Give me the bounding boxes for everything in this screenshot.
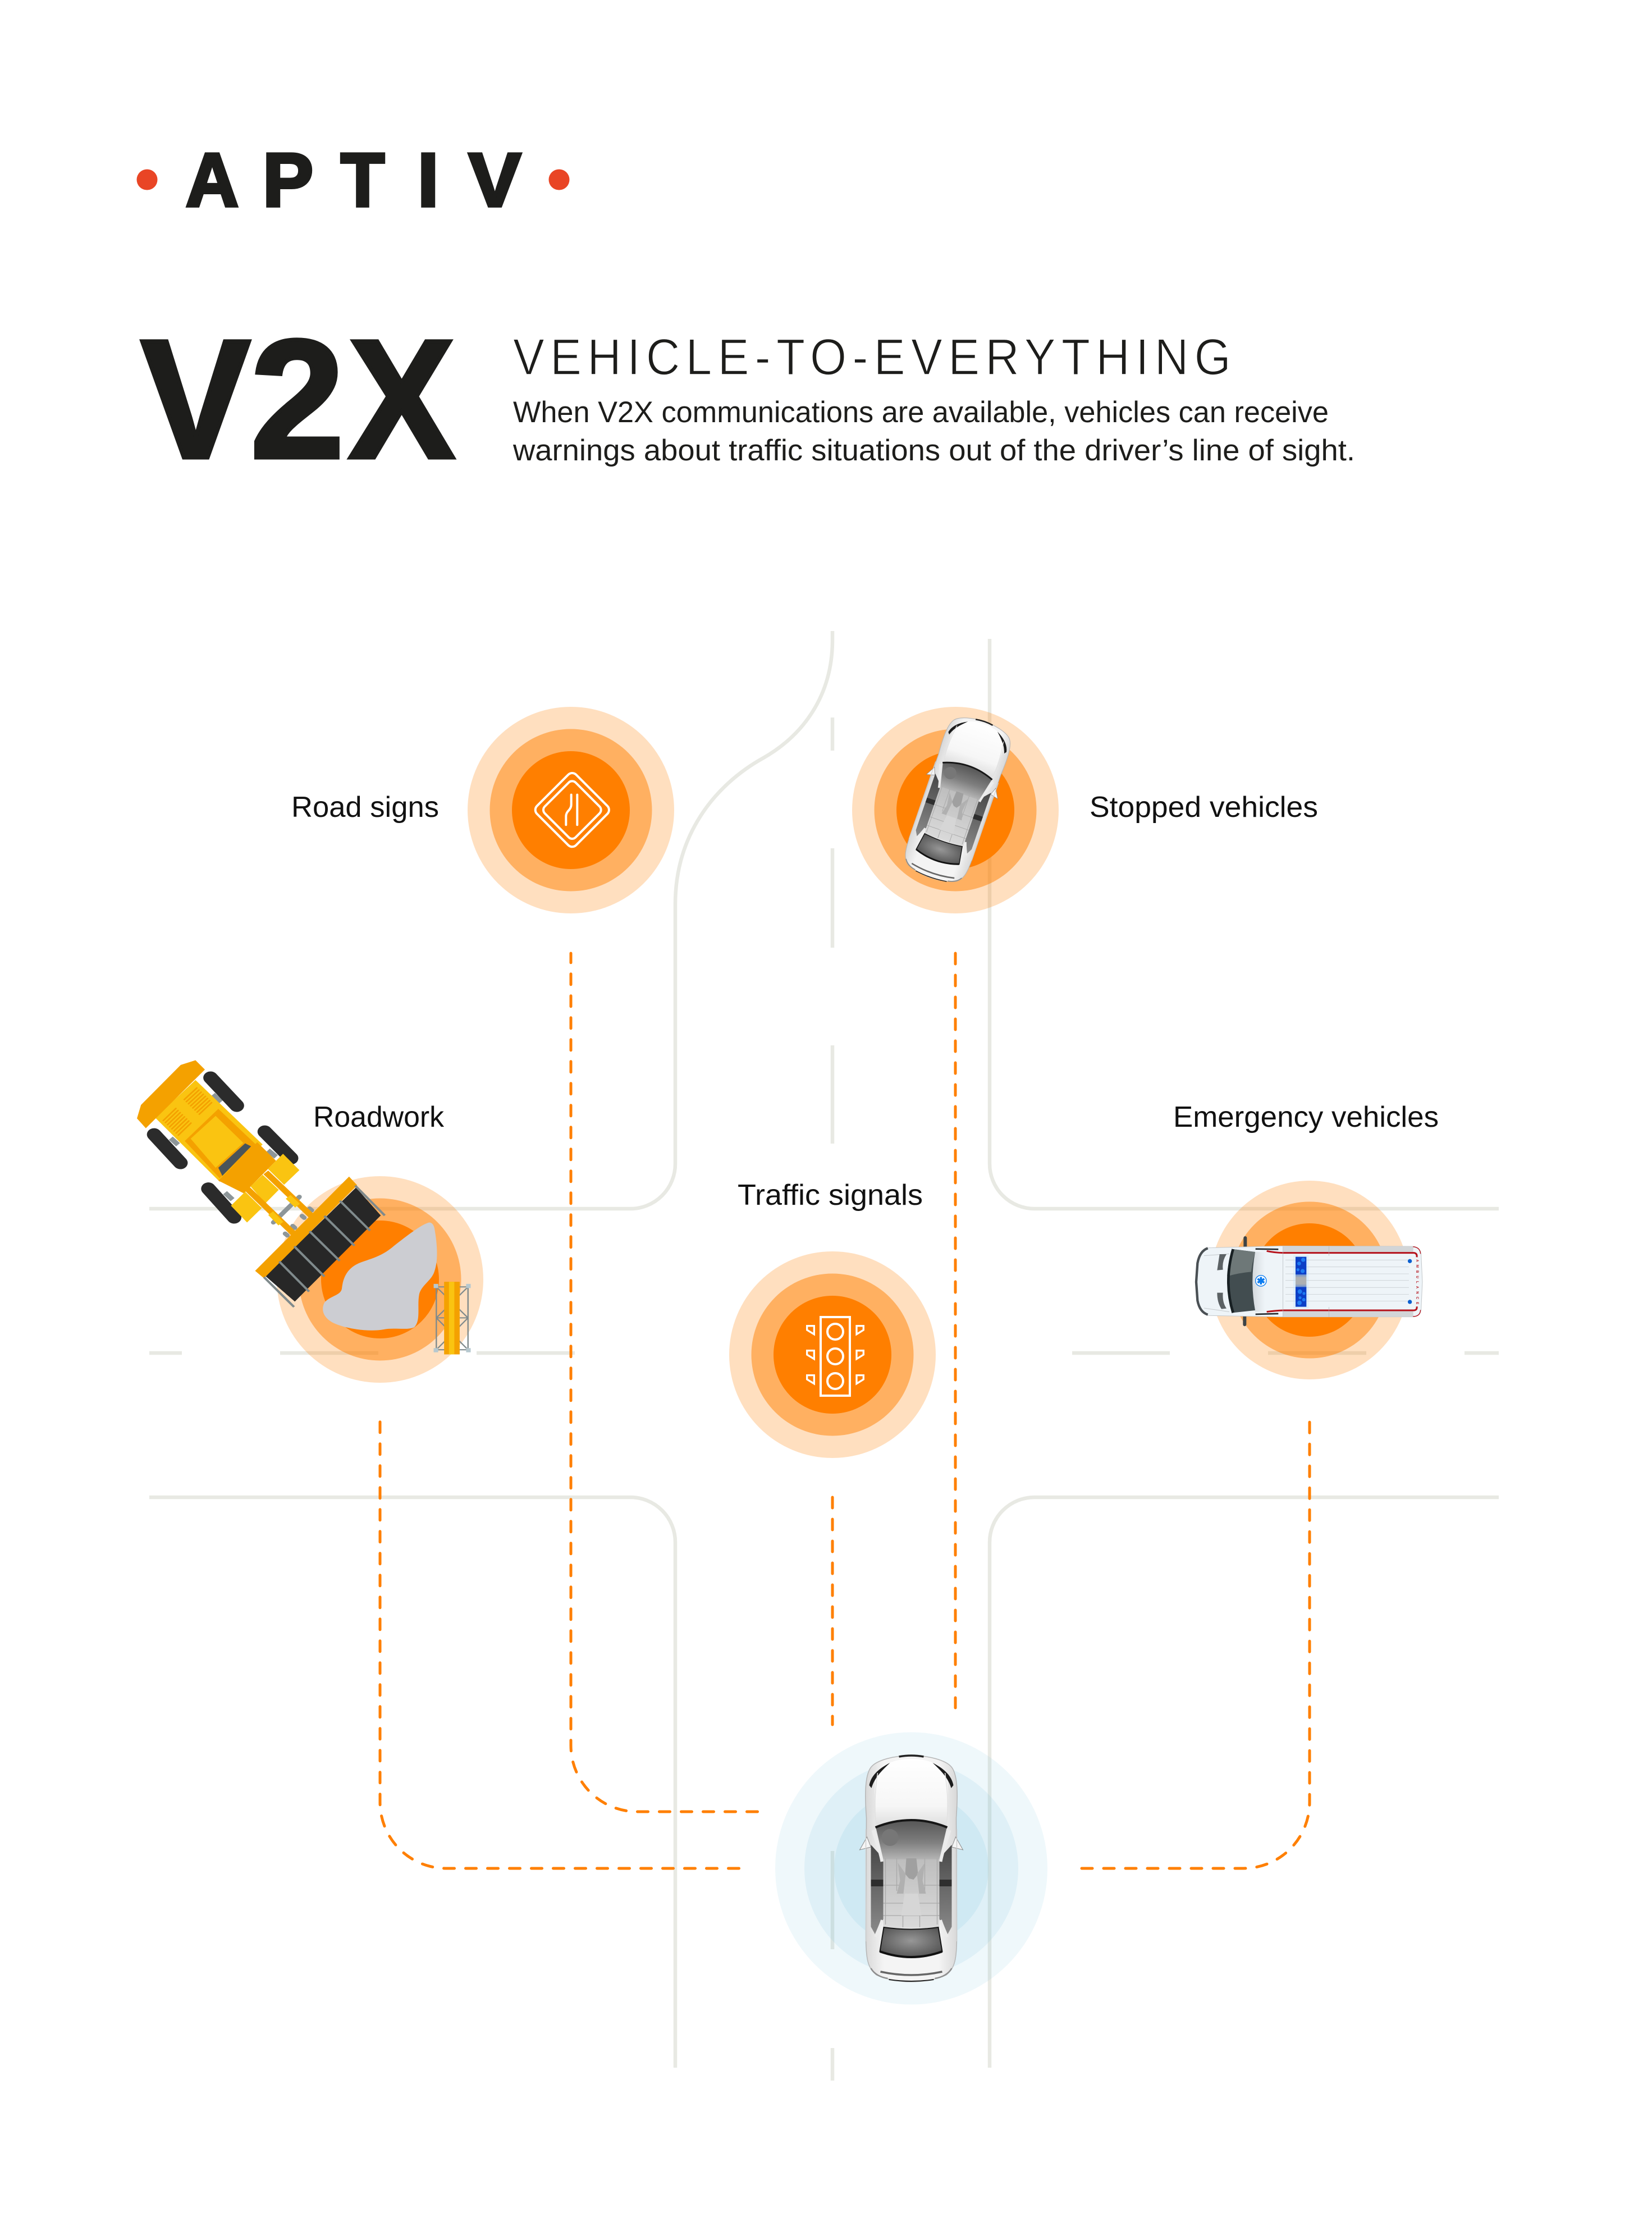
intro text — [512, 396, 1355, 467]
title: V2X: X — [349, 305, 455, 493]
rear lettering: AMBULANCE — [1415, 1259, 1418, 1304]
road network — [149, 631, 1499, 2081]
icon: stopped car — [895, 709, 1020, 890]
signal circle: emergency vehicles — [1196, 1181, 1422, 1379]
label: stopped vehicles: Stopped vehicles — [1090, 791, 1318, 824]
label: roadwork: Roadwork — [313, 1101, 445, 1133]
intro text: warnings about traffic situations out of the driver’s line of sight. — [512, 434, 1355, 467]
logo wordmark — [186, 138, 521, 222]
label: road signs: Road signs — [291, 791, 439, 824]
signal circle: stopped vehicles — [852, 707, 1059, 913]
title: V2X: V — [141, 305, 251, 493]
logo: APTIV — [137, 138, 569, 222]
logo dot right — [549, 170, 569, 190]
title: V2X — [141, 305, 455, 493]
icon: traffic light — [807, 1317, 863, 1396]
signal circle: host vehicle — [775, 1733, 1047, 2004]
gravel pile — [323, 1222, 437, 1331]
barrier — [434, 1282, 471, 1354]
logo wordmark: T — [341, 138, 385, 222]
icon: host car — [860, 1756, 963, 1982]
label: emergency vehicles: Emergency vehicles — [1173, 1101, 1439, 1133]
signal paths: dashed orange — [380, 953, 1310, 1868]
title: V2X: 2 — [250, 305, 344, 493]
icon: road narrowing sign — [533, 771, 611, 849]
subtitle: vehicle-to-everything: VEHICLE-TO-EVERYTHING — [513, 328, 1231, 386]
icon: ambulance — [1196, 1238, 1422, 1324]
signal circle: roadwork — [137, 1061, 483, 1383]
logo wordmark: I — [418, 138, 439, 222]
logo wordmark: P — [263, 138, 313, 222]
grader — [137, 1061, 385, 1307]
logo wordmark: V — [469, 138, 521, 222]
logo dot left — [137, 170, 157, 190]
label: traffic signals: Traffic signals — [738, 1179, 923, 1212]
emergency lights — [1293, 1255, 1308, 1308]
star of life — [1256, 1276, 1266, 1286]
signal circle: traffic signals — [729, 1251, 936, 1458]
icon: gravel pile, grader and barrier — [137, 1061, 471, 1354]
intro text: When V2X communications are available, vehicles can receive — [513, 396, 1329, 429]
signal circle: road signs — [468, 707, 674, 913]
logo wordmark: A — [186, 138, 239, 222]
